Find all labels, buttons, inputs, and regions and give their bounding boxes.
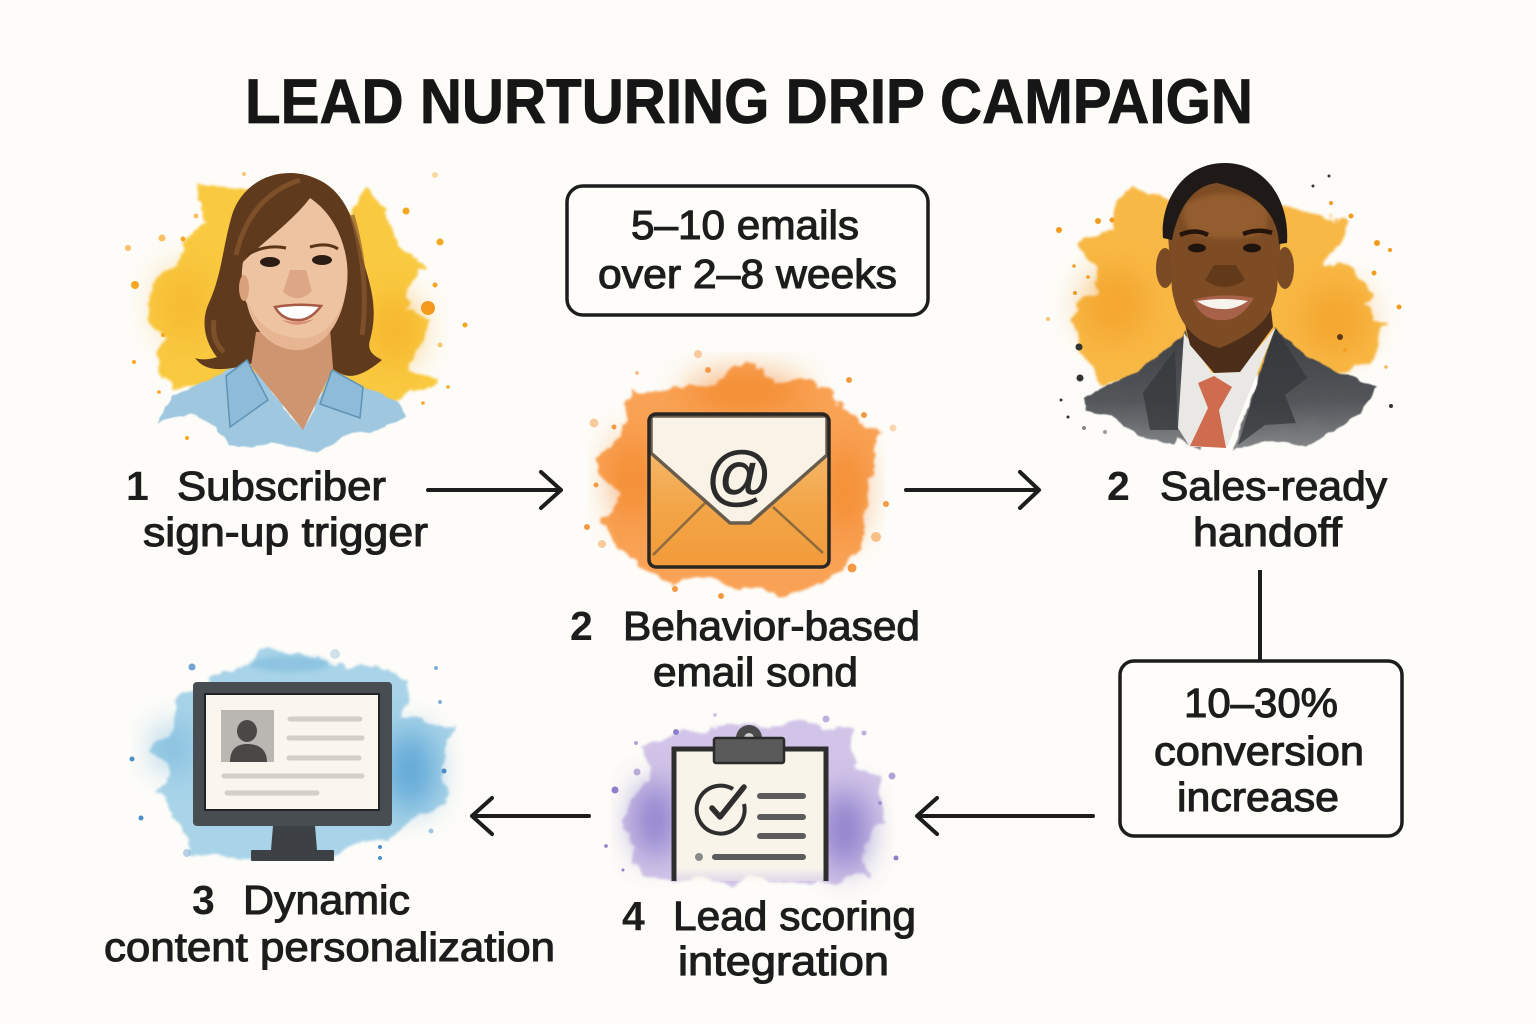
label: dynamic content personalization	[104, 877, 555, 970]
arrow: sign-up to email	[428, 472, 561, 508]
smile	[1193, 295, 1254, 320]
bullet	[695, 853, 703, 861]
callout: conversion increase	[1120, 661, 1402, 836]
nose	[1205, 265, 1245, 287]
label: behavior-based email send	[570, 603, 920, 695]
eyes	[260, 255, 332, 267]
label: subscriber sign-up trigger	[126, 463, 428, 555]
illustration: email envelope	[584, 350, 896, 599]
mouth	[275, 305, 321, 325]
ears	[1156, 247, 1294, 289]
title: LEAD NURTURING DRIP CAMPAIGN	[245, 67, 1253, 137]
blue watercolor splash	[130, 649, 455, 860]
label: behavior-based email send: email sond	[653, 649, 858, 695]
orange watercolor splash	[584, 350, 896, 599]
profile photo	[221, 710, 274, 762]
label: lead scoring integration: Lead scoring	[673, 893, 916, 939]
callout: emails over weeks	[567, 186, 928, 315]
envelope body	[649, 414, 829, 567]
label: subscriber sign-up trigger: Subscriber	[177, 463, 386, 509]
callout: emails over weeks: 5–10 emails	[631, 202, 859, 248]
label: sales-ready handoff: handoff	[1193, 509, 1343, 555]
label: lead scoring integration: integration	[678, 938, 889, 984]
callout: emails over weeks: over 2–8 weeks	[598, 251, 897, 297]
yellow watercolor splash	[125, 172, 468, 440]
connector: handoff to conversion callout	[1258, 570, 1262, 661]
arrow: email to handoff	[906, 472, 1039, 508]
illustration: sales-ready man portrait	[1046, 163, 1402, 450]
monitor frame	[193, 682, 392, 826]
envelope fold lines	[653, 503, 823, 555]
jacket lapels	[1143, 327, 1307, 445]
nose	[283, 270, 312, 298]
label: subscriber sign-up trigger: sign-up trigger	[143, 509, 428, 555]
label: sales-ready handoff: 2	[1107, 463, 1130, 509]
clipboard outline	[674, 749, 826, 881]
jacket	[1085, 327, 1378, 450]
score lines	[715, 796, 803, 857]
label: subscriber sign-up trigger: 1	[126, 463, 149, 509]
clipboard paper	[674, 749, 826, 881]
callout: conversion increase: increase	[1177, 774, 1339, 820]
face	[242, 198, 348, 350]
callout: conversion increase: conversion	[1154, 728, 1364, 774]
check circle	[697, 786, 745, 834]
label: sales-ready handoff: Sales-ready	[1160, 463, 1388, 509]
dress shirt	[1178, 327, 1276, 447]
arrow: lead scoring to dynamic content	[472, 798, 589, 834]
head	[1168, 176, 1281, 348]
eyes	[1188, 244, 1261, 252]
tie	[1190, 376, 1232, 448]
label: sales-ready handoff	[1107, 463, 1388, 555]
illustration: monitor with profile	[130, 649, 455, 861]
label: dynamic content personalization: Dynamic	[243, 877, 410, 923]
label: dynamic content personalization: 3	[192, 877, 215, 923]
collar	[226, 360, 363, 427]
hair back	[195, 173, 382, 376]
callout: conversion increase: 10–30%	[1184, 680, 1338, 726]
neck	[1183, 300, 1273, 373]
label: lead scoring integration: 4	[622, 893, 645, 939]
purple watercolor splash	[604, 713, 898, 882]
arrow: conversion callout to lead scoring	[917, 798, 1093, 834]
monitor stand	[251, 826, 334, 861]
envelope flap	[651, 416, 827, 523]
text lines	[224, 719, 362, 793]
label: dynamic content personalization: content personalization	[104, 924, 555, 970]
neck	[251, 328, 333, 430]
eyebrows	[1180, 231, 1272, 235]
illustration: woman subscriber portrait	[125, 172, 468, 453]
hair	[1163, 163, 1287, 244]
label: behavior-based email send: 2	[570, 603, 593, 649]
label: behavior-based email send: Behavior-based	[623, 603, 920, 649]
clip	[714, 725, 784, 763]
label: lead scoring integration	[622, 893, 916, 984]
at symbol: @	[706, 438, 772, 512]
shirt	[157, 360, 407, 453]
hair highlight	[213, 180, 364, 352]
monitor screen	[205, 694, 379, 810]
illustration: lead scoring clipboard	[604, 713, 898, 882]
amber watercolor splash	[1046, 174, 1402, 434]
eyebrows	[247, 245, 338, 255]
